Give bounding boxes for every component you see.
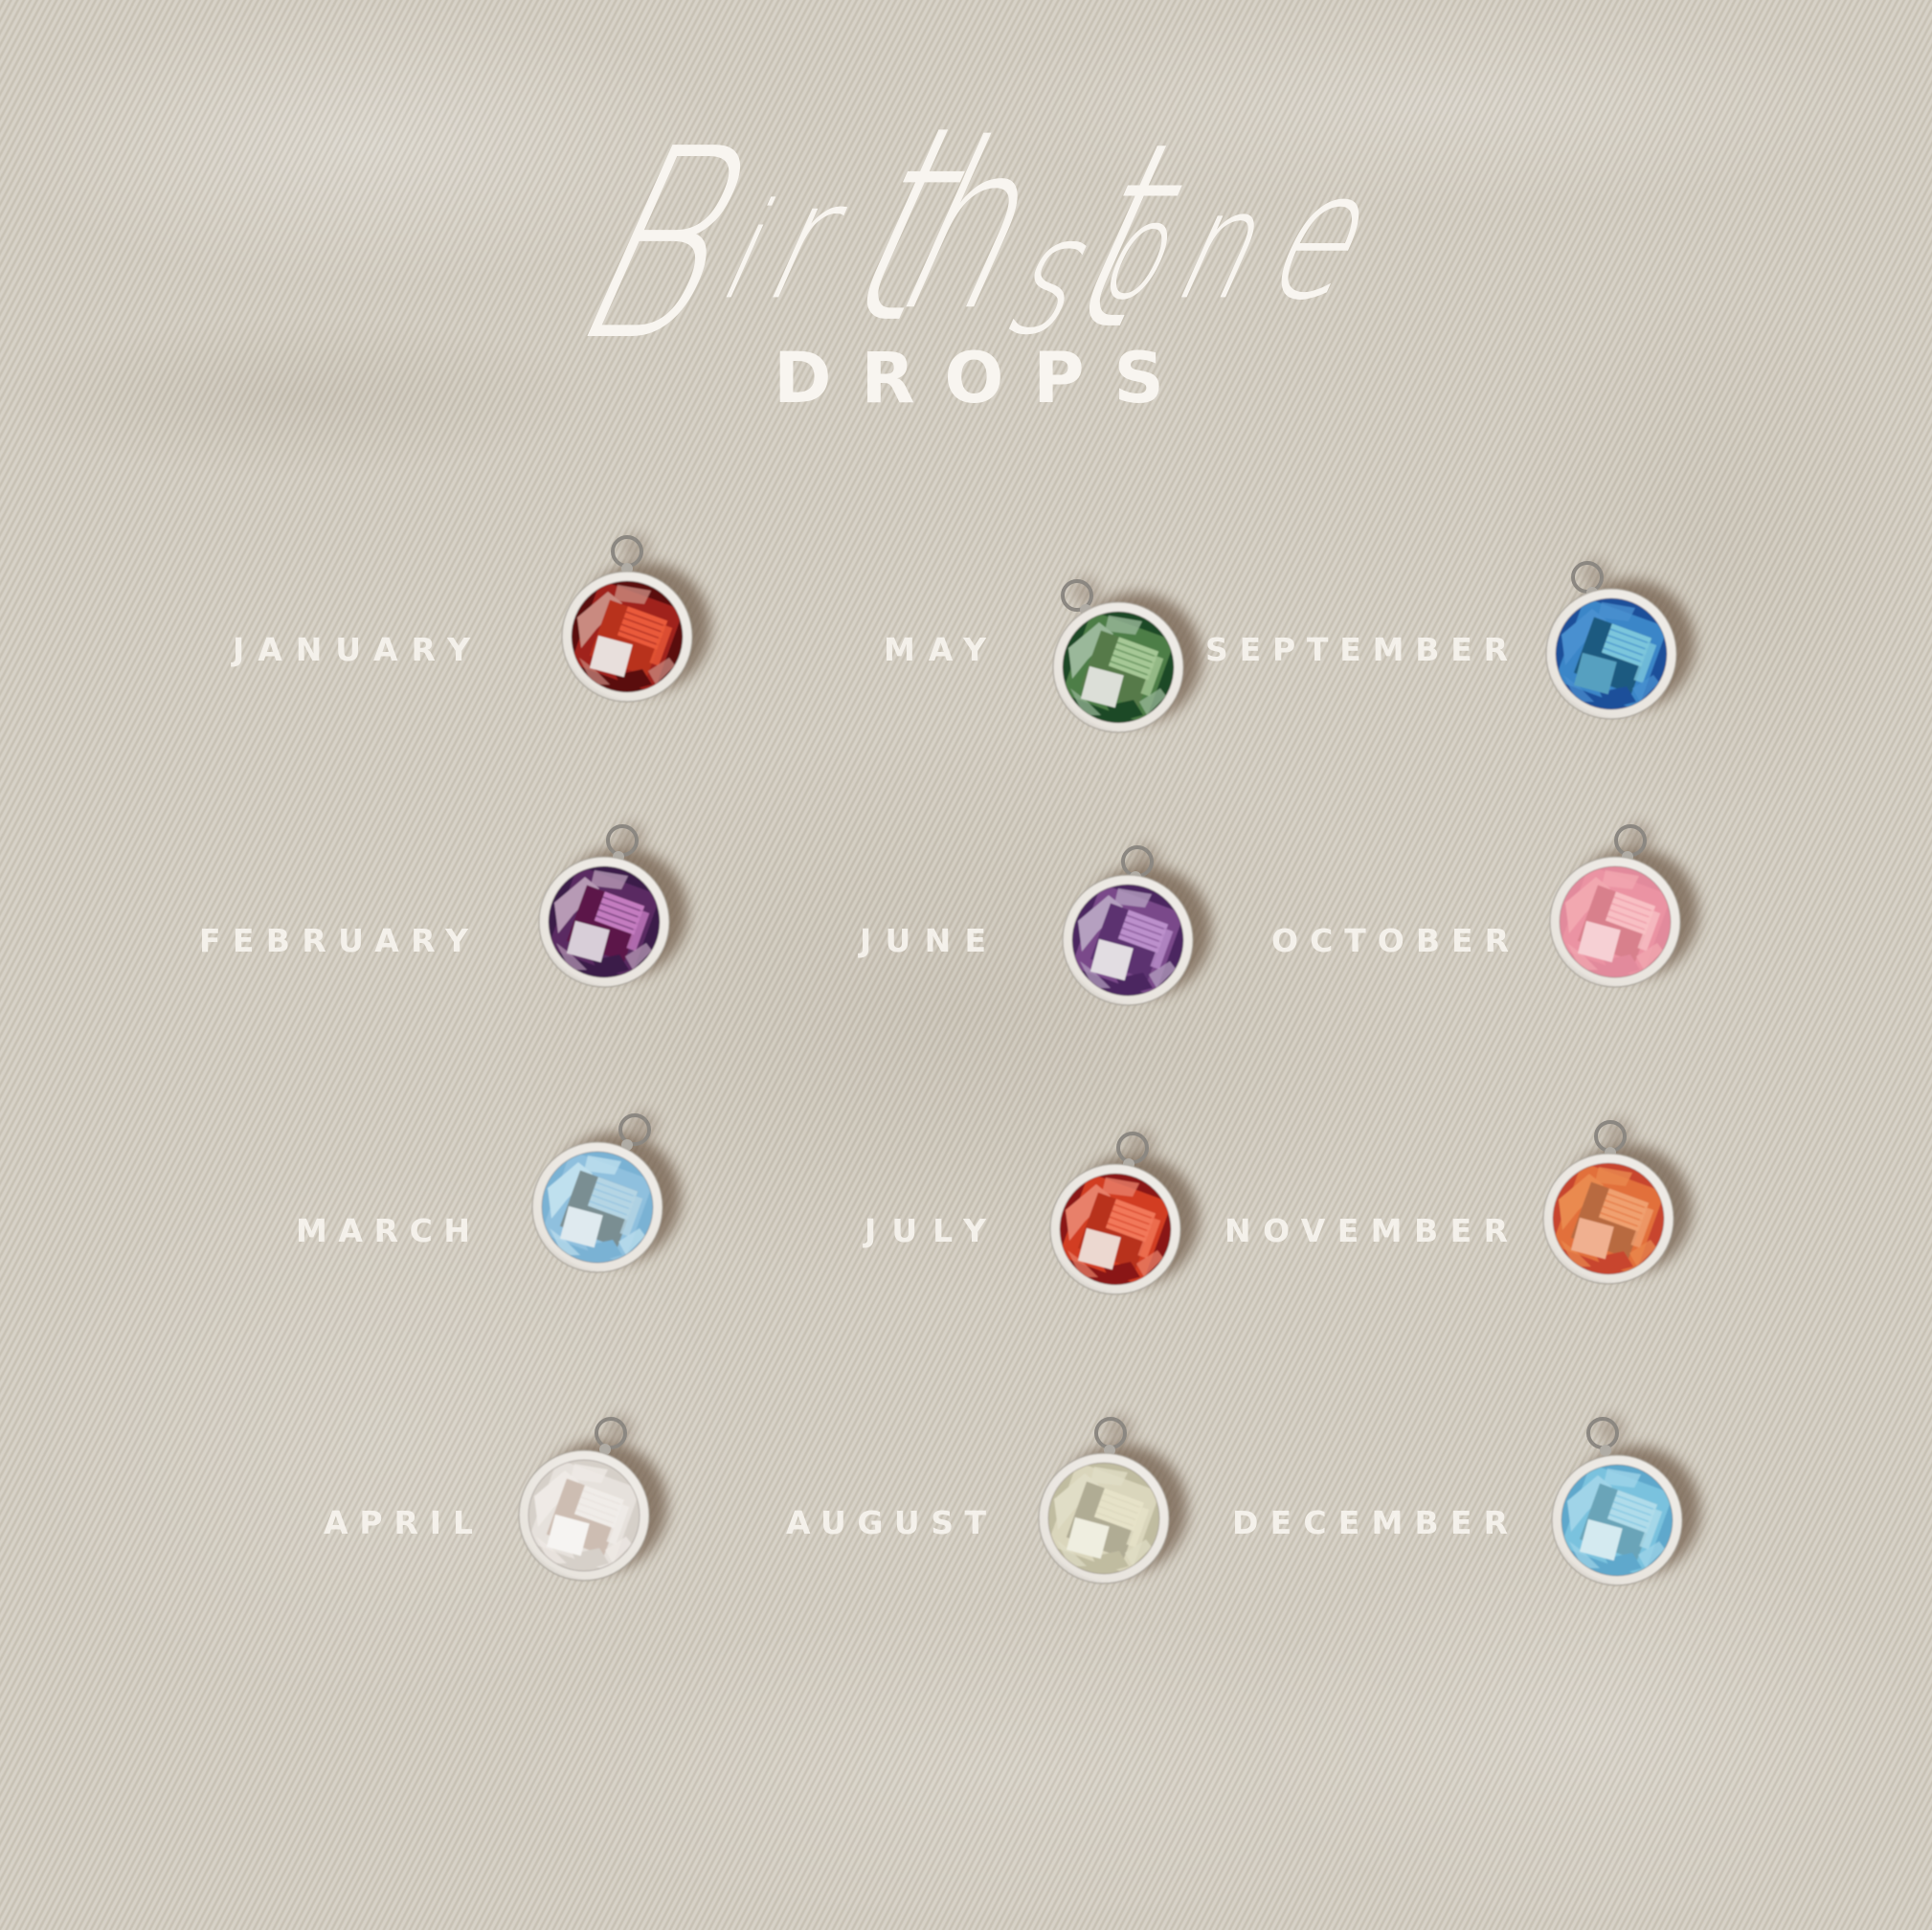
row labels and charms: column 1: [199, 533, 710, 1581]
subtitle: DROPS: DROPS: [774, 338, 1164, 419]
title: Birthstone: n: [1155, 160, 1297, 332]
charm: April crystal: [519, 1415, 667, 1581]
charm: October rose: [1550, 822, 1698, 987]
charm: February amethyst: [539, 822, 687, 987]
charm: December blue topaz: [1552, 1415, 1700, 1585]
label: November: NOVEMBER: [1224, 1212, 1508, 1249]
title: Birthstone: h: [865, 95, 1086, 360]
title: Birthstone: t: [804, 71, 1019, 382]
charm: May peridot: [1053, 577, 1202, 732]
label: September: SEPTEMBER: [1205, 631, 1508, 668]
charm: August pale peridot: [1039, 1415, 1187, 1583]
title: Birthstone: s: [982, 183, 1126, 370]
label: May: MAY: [884, 631, 987, 668]
label: October: OCTOBER: [1271, 922, 1509, 959]
title: Birthstone: i: [703, 174, 797, 327]
label: February: FEBRUARY: [199, 922, 469, 959]
title: Birthstone: B: [537, 93, 795, 398]
label: July: JULY: [863, 1212, 987, 1249]
charm: June alexandrite: [1063, 843, 1211, 1005]
label: January: JANUARY: [231, 631, 471, 668]
title: Birthstone: [537, 71, 1437, 398]
label: December: DECEMBER: [1232, 1504, 1508, 1541]
title: Birthstone: t: [1030, 89, 1233, 385]
charm: March aquamarine: [532, 1111, 681, 1272]
label: August: AUGUST: [786, 1504, 986, 1541]
charm: January garnet: [562, 533, 710, 702]
row labels and charms: column 2: [786, 577, 1211, 1583]
charm: July ruby: [1050, 1130, 1199, 1294]
label: March: MARCH: [296, 1212, 470, 1249]
charm: September sapphire: [1546, 559, 1695, 719]
charm: November topaz: [1543, 1118, 1692, 1284]
row labels and charms: column 3: [1205, 559, 1700, 1585]
title: Birthstone: r: [743, 147, 874, 335]
label: April: APRIL: [324, 1504, 473, 1541]
label: June: JUNE: [858, 922, 986, 959]
title: Birthstone: o: [1081, 174, 1206, 327]
title: Birthstone: e: [1242, 135, 1408, 338]
